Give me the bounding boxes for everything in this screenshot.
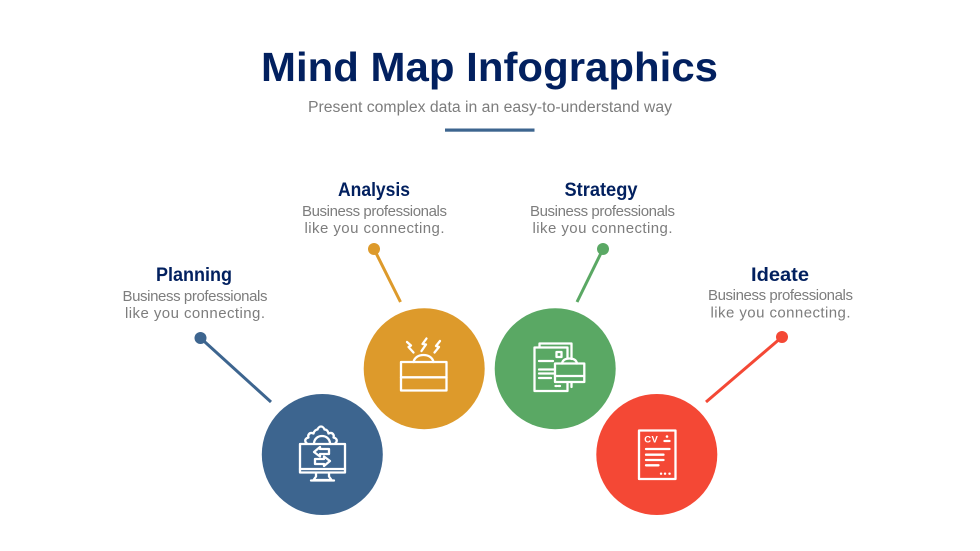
connector: planning — [194, 332, 271, 402]
text: planning description — [122, 288, 268, 322]
title underline — [445, 128, 534, 132]
text: planning description: Business professionals — [122, 288, 268, 305]
panel: ideate — [596, 265, 853, 515]
heading: planning: Planning — [156, 265, 232, 286]
icon: CV document: CV — [644, 435, 659, 446]
connector: ideate — [706, 331, 788, 402]
text: analysis description: like you connecting. — [304, 220, 444, 237]
text: ideate description: Business professionals — [708, 287, 853, 304]
circle: analysis — [364, 308, 485, 429]
text: planning description: like you connecting. — [125, 305, 265, 322]
text: analysis description — [302, 203, 447, 237]
heading: ideate: Ideate — [751, 265, 809, 286]
text: strategy description: like you connecting. — [532, 220, 672, 237]
circle: strategy — [495, 308, 616, 429]
panel: planning — [122, 265, 383, 515]
subtitle: Present complex data in an easy-to-understand way — [308, 99, 672, 116]
text: analysis description: Business professionals — [302, 203, 447, 220]
icon: briefcase with lightning — [401, 338, 446, 390]
icon: monitor with gear and arrows — [300, 426, 345, 480]
heading: analysis: Analysis — [338, 180, 410, 201]
text: ideate description: like you connecting. — [710, 304, 850, 322]
connector: strategy — [577, 243, 609, 302]
panel: analysis — [302, 180, 485, 429]
icon: CV document — [639, 430, 676, 479]
text: strategy description: Business professionals — [530, 203, 675, 220]
circle: ideate — [596, 394, 717, 515]
panel: strategy — [495, 180, 675, 429]
heading: strategy: Strategy — [564, 180, 638, 201]
icon: documents with briefcase — [534, 344, 584, 391]
text: ideate description — [708, 287, 853, 322]
circle: planning — [262, 394, 383, 515]
title: Mind Map Infographics — [261, 44, 718, 90]
text: strategy description — [530, 203, 675, 237]
connector: analysis — [368, 243, 400, 302]
